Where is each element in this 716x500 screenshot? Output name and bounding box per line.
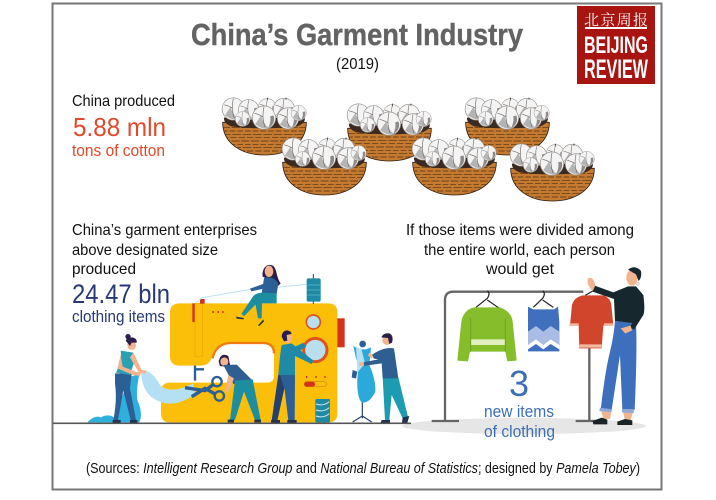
items per person statistic — [484, 363, 555, 441]
clothing rack illustration — [432, 285, 613, 421]
items per person statistic: 3 — [509, 363, 529, 404]
ground line — [53, 422, 411, 424]
mannequin with dress — [352, 341, 375, 422]
logo: Beijing Review: BEIJING — [584, 32, 648, 59]
thread and top spool — [195, 274, 321, 304]
items per person statistic: new items — [484, 403, 554, 421]
cotton statistic text: China produced — [72, 93, 175, 110]
garment enterprises text: above designated size — [72, 242, 218, 259]
garment enterprises text — [72, 222, 257, 326]
pale fabric — [141, 370, 195, 404]
woman holding fabric and scissors — [87, 334, 224, 423]
sources credit: (Sources: Intelligent Research Group and National Bureau of Statistics; designed by Pamela Tobey) — [86, 460, 640, 477]
garment enterprises text: produced — [72, 261, 136, 278]
woman shopper — [588, 267, 644, 425]
division text: the entire world, each person — [424, 242, 615, 259]
title: China’s Garment Industry — [191, 17, 524, 52]
division text — [406, 222, 634, 278]
division text: If those items were divided among — [406, 222, 634, 239]
cotton statistic text: 5.88 mln — [73, 112, 166, 142]
garment enterprises text: China’s garment enterprises — [72, 222, 257, 239]
green sweater — [457, 291, 517, 361]
blue fabric pile — [87, 374, 141, 422]
garment enterprises text: clothing items — [72, 308, 165, 326]
sewing machine scene — [161, 265, 345, 422]
garment enterprises text: 24.47 bln — [72, 279, 170, 309]
logo: Beijing Review: REVIEW — [584, 54, 648, 84]
woman cutting fabric — [219, 355, 261, 422]
cotton statistic text — [72, 93, 175, 160]
cotton baskets — [222, 98, 595, 201]
logo: Beijing Review: 北京周报 — [584, 9, 648, 30]
logo: Beijing Review — [577, 6, 655, 84]
tailor at mannequin — [359, 333, 409, 423]
rack — [432, 292, 600, 421]
blue vest — [528, 291, 559, 351]
cotton statistic text: tons of cotton — [72, 142, 165, 160]
red t-shirt — [569, 285, 613, 348]
wheel man, mannequin and tailor — [271, 330, 409, 423]
seated woman — [236, 265, 281, 326]
sewing machine — [161, 299, 345, 422]
scissors — [185, 377, 224, 401]
year subtitle: (2019) — [336, 56, 379, 73]
division text: would get — [485, 261, 555, 278]
man adjusting wheel — [271, 330, 313, 423]
rack floor shadow — [402, 418, 646, 434]
standing woman — [113, 334, 147, 423]
items per person statistic: of clothing — [484, 423, 555, 441]
